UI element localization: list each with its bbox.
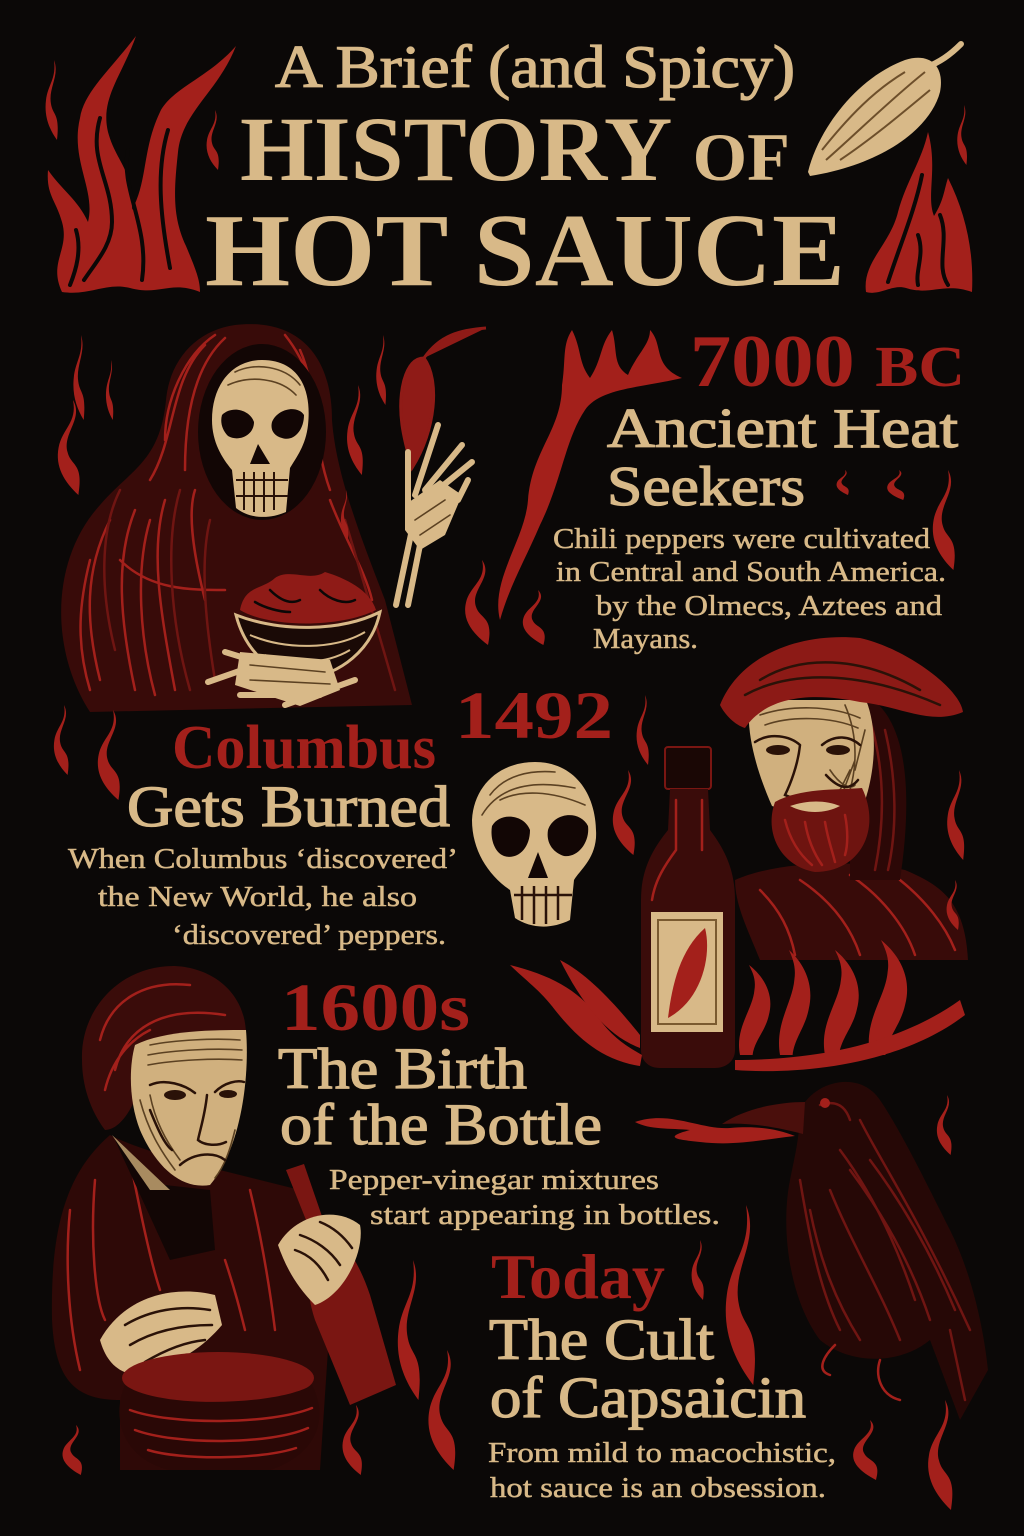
text: ancient body: by the Olmecs, Aztees and (596, 590, 943, 622)
heading: The Birth of the Bottle: of the Bottle (280, 1092, 602, 1157)
icon: top-left flames (46, 36, 236, 293)
heading: Columbus Gets Burned (127, 714, 450, 839)
panel: 1600s man illustration (52, 966, 396, 1470)
pot (119, 1352, 319, 1470)
hair (82, 966, 246, 1130)
heading: The Cult of Capsaicin: of Capsaicin (490, 1365, 806, 1430)
title: A Brief (and Spicy) (275, 34, 795, 100)
flames around reaper (58, 335, 386, 540)
text: ancient body (553, 523, 946, 655)
hand in pot (100, 1291, 222, 1375)
heading: Ancient Heat Seekers (607, 398, 959, 518)
text: today body: hot sauce is an obsession. (490, 1472, 826, 1504)
heading: The Birth of the Bottle: The Birth (278, 1036, 527, 1101)
hand on bottle (278, 1215, 361, 1305)
heading: Columbus Gets Burned: Gets Burned (127, 774, 450, 839)
heading: Ancient Heat Seekers: Seekers (607, 456, 805, 518)
hair (850, 690, 906, 880)
text: Columbus body: When Columbus ‘discovered’ (68, 843, 458, 875)
panel: ancient reaper illustration (61, 324, 486, 712)
heading: Ancient Heat Seekers: Ancient Heat (607, 398, 959, 460)
text: Columbus body (68, 843, 458, 951)
flames left of Columbus (54, 705, 120, 800)
beard (772, 788, 869, 872)
flames around bottle (510, 695, 965, 1071)
heading: 7000 BC: 7000 BC (690, 321, 965, 403)
raven body (786, 1082, 988, 1420)
beak (722, 1102, 805, 1134)
red bottle (286, 1164, 396, 1405)
title (205, 34, 845, 308)
red pepper held (401, 328, 486, 468)
flames beside the man (62, 1260, 455, 1475)
feet (822, 1345, 900, 1400)
text: 1600s body (329, 1164, 720, 1231)
heading: Today: Today (491, 1241, 665, 1312)
face (131, 1030, 247, 1186)
shirt and cravat (115, 1140, 215, 1260)
raven eye (820, 1098, 830, 1108)
label chili (668, 928, 707, 1018)
text: ancient body: Chili peppers were cultivated (553, 523, 931, 555)
text: today body: From mild to macochistic, (488, 1437, 836, 1469)
skull (212, 360, 309, 517)
text: 1600s body: start appearing in bottles. (370, 1199, 720, 1231)
hood opening (198, 344, 326, 520)
heading: 1600s: 1600s (281, 969, 470, 1045)
icon: top-right flames (866, 105, 972, 293)
icon: hot sauce bottle (641, 747, 735, 1068)
title: HOT SAUCE (205, 193, 845, 308)
flames near raven (692, 1095, 952, 1510)
text: today body (488, 1437, 836, 1504)
icon: chili pepper top right (808, 44, 961, 176)
robe (61, 324, 412, 712)
fire breath (635, 1118, 795, 1143)
bony hand (396, 425, 472, 605)
panel: raven illustration (635, 1082, 988, 1420)
face (749, 700, 874, 832)
coat (52, 1135, 330, 1470)
robe (735, 863, 968, 960)
heading: Columbus Gets Burned: Columbus (172, 714, 436, 782)
panel: Columbus portrait (720, 637, 968, 960)
title: HISTORY OF (240, 98, 790, 200)
text: 1600s body: Pepper-vinegar mixtures (329, 1164, 659, 1196)
heading: The Cult of Capsaicin (489, 1307, 806, 1430)
text: Columbus body: the New World, he also (98, 881, 417, 913)
lower bony hand (208, 652, 355, 706)
robe folds (81, 335, 372, 695)
hat (720, 637, 963, 728)
text: Columbus body: ‘discovered’ peppers. (172, 919, 446, 951)
flames beside ancient text (465, 470, 955, 645)
heading: 1492: 1492 (455, 677, 613, 753)
heading: The Cult of Capsaicin: The Cult (489, 1307, 714, 1372)
icon: branching flame (498, 330, 682, 620)
bottle label (651, 912, 723, 1032)
bowl of peppers (236, 572, 380, 678)
heading: The Birth of the Bottle (278, 1036, 602, 1157)
icon: skull (472, 762, 596, 927)
text: ancient body: in Central and South America. (556, 556, 946, 588)
text: ancient body: Mayans. (593, 623, 698, 655)
